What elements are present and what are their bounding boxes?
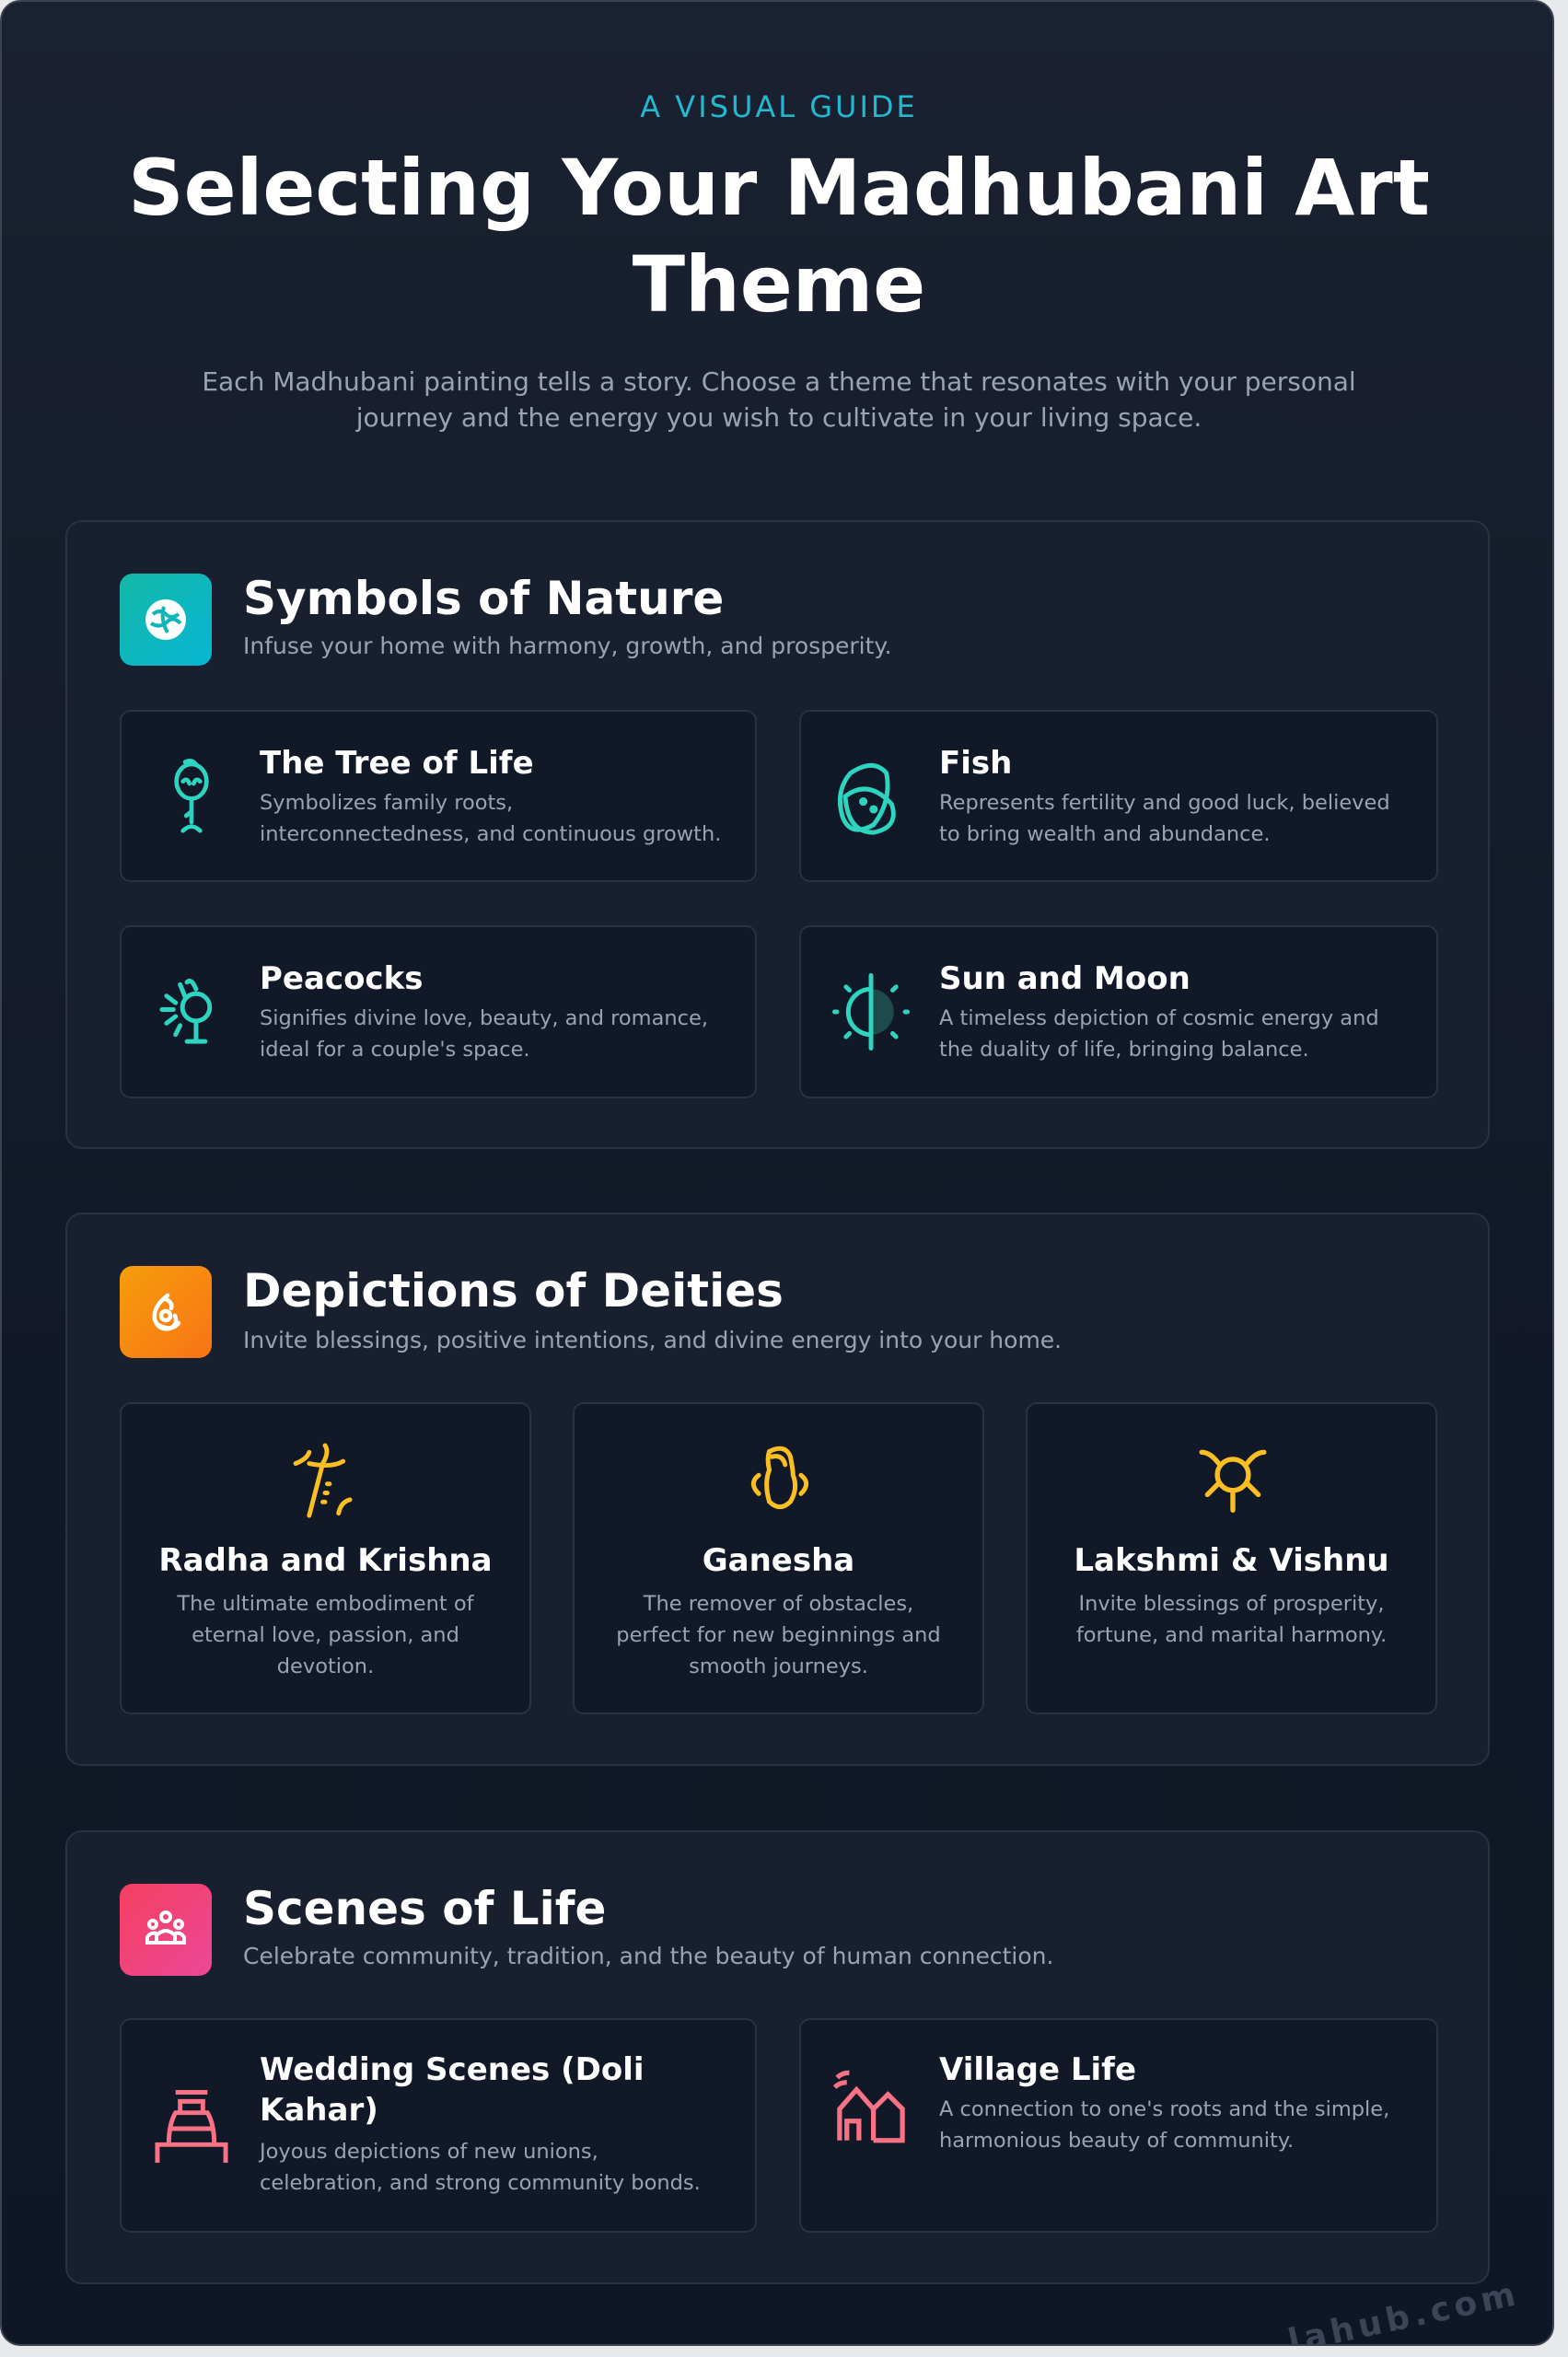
card text: smooth journeys. — [689, 1655, 868, 1678]
card title: Sun and Moon — [939, 960, 1191, 997]
title — [128, 143, 1430, 330]
card: fish — [799, 710, 1438, 882]
section subtitle: Invite blessings, positive intentions, and divine energy into your home. — [243, 1327, 1062, 1353]
card: lakshmi vishnu — [1026, 1402, 1437, 1714]
card text: The ultimate embodiment of — [177, 1592, 474, 1616]
card text: harmonious beauty of community. — [939, 2129, 1294, 2153]
icon: lotus — [1199, 1449, 1267, 1513]
subtitle: journey and the energy you wish to cultivate in your living space. — [356, 402, 1202, 433]
subtitle — [202, 366, 1356, 433]
panel: depictions of deities — [65, 1213, 1490, 1766]
card: sun and moon — [799, 925, 1438, 1098]
card title: Fish — [939, 745, 1012, 782]
section subtitle: Celebrate community, tradition, and the beauty of human connection. — [243, 1943, 1053, 1969]
panel: symbols of nature — [65, 520, 1490, 1149]
card text: Invite blessings of prosperity, — [1078, 1592, 1385, 1616]
card title: Kahar) — [260, 2092, 378, 2129]
card text: ideal for a couple's space. — [260, 1038, 530, 1062]
card title: The Tree of Life — [260, 745, 534, 782]
heading: Scenes of Life — [243, 1882, 606, 1935]
card title: Ganesha — [703, 1542, 854, 1579]
card text: A connection to one's roots and the simple, — [939, 2097, 1389, 2121]
card text — [939, 2097, 1389, 2153]
card: tree of life — [120, 710, 757, 882]
card text — [1076, 1592, 1387, 1647]
icon: globe — [120, 574, 212, 666]
card: peacocks — [120, 925, 757, 1098]
card text: The remover of obstacles, — [644, 1592, 913, 1616]
card text: eternal love, passion, and — [192, 1623, 459, 1647]
eyebrow label: A VISUAL GUIDE — [640, 89, 918, 124]
card: village life — [799, 2018, 1438, 2233]
card text: the duality of life, bringing balance. — [939, 1038, 1309, 1062]
card text: Joyous depictions of new unions, — [260, 2140, 598, 2164]
card text: perfect for new beginnings and — [616, 1623, 941, 1647]
icon: peacock — [159, 978, 212, 1044]
card text: celebration, and strong community bonds. — [260, 2171, 701, 2195]
card text: devotion. — [277, 1655, 374, 1678]
icon: ganesha — [751, 1446, 808, 1510]
card text: fortune, and marital harmony. — [1076, 1623, 1387, 1647]
heading: Depictions of Deities — [243, 1264, 784, 1318]
card text — [616, 1592, 941, 1678]
card text — [177, 1592, 474, 1678]
icon: sun and moon — [832, 973, 910, 1051]
icon: flame — [120, 1266, 212, 1358]
heading: Symbols of Nature — [243, 572, 724, 625]
icon: palanquin — [155, 2090, 228, 2163]
icon: people — [120, 1884, 212, 1976]
icon: fish — [838, 762, 896, 835]
card text: to bring wealth and abundance. — [939, 822, 1271, 846]
card text: Symbolizes family roots, — [260, 791, 513, 815]
icon: flute — [293, 1444, 352, 1517]
card: radha krishna — [120, 1402, 531, 1714]
card title: Radha and Krishna — [158, 1542, 493, 1579]
card: ganesha — [573, 1402, 984, 1714]
icon: tree — [174, 759, 209, 833]
card title: Wedding Scenes (Doli — [260, 2051, 645, 2088]
title: Theme — [633, 239, 925, 330]
card text — [260, 791, 721, 846]
icon: house — [832, 2070, 905, 2143]
section subtitle: Infuse your home with harmony, growth, and prosperity. — [243, 633, 892, 659]
subtitle: Each Madhubani painting tells a story. Choose a theme that resonates with your personal — [202, 366, 1356, 397]
card text — [258, 2140, 701, 2195]
card text — [260, 1006, 708, 1062]
card title: Village Life — [939, 2051, 1136, 2088]
card text: interconnectedness, and continuous growth. — [260, 822, 721, 846]
card: wedding — [120, 2018, 757, 2233]
card title: Lakshmi & Vishnu — [1074, 1542, 1389, 1579]
title: Selecting Your Madhubani Art — [128, 143, 1430, 233]
panel: scenes of life — [65, 1830, 1490, 2284]
card text — [939, 1006, 1379, 1062]
card text: Represents fertility and good luck, believed — [939, 791, 1390, 815]
card text: Signifies divine love, beauty, and romance, — [260, 1006, 708, 1030]
card text — [939, 791, 1390, 846]
card title — [260, 2051, 645, 2129]
card title: Peacocks — [260, 960, 423, 997]
card text: A timeless depiction of cosmic energy and — [939, 1006, 1379, 1030]
